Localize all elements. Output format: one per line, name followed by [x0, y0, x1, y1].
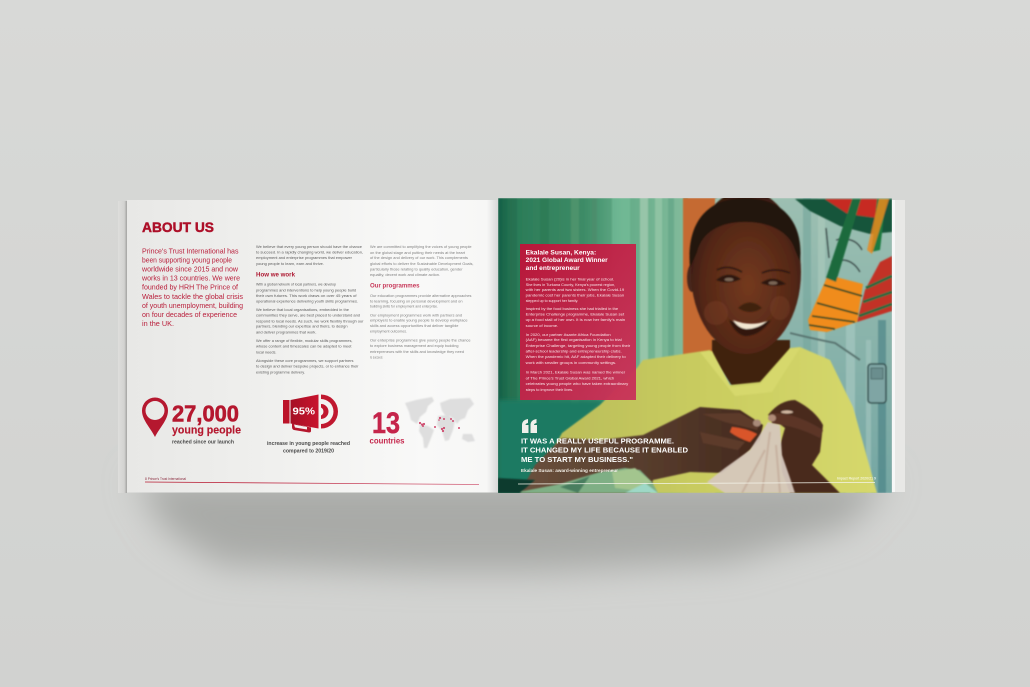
sub-heading: our programmes: Our programmes — [370, 282, 420, 290]
sub-heading: how we work: How we work — [256, 272, 295, 278]
text column: how we work — [256, 244, 364, 375]
text column: our programmes: to learning, focusing on personal development and on — [370, 298, 462, 303]
leaves — [498, 468, 658, 493]
text column: our programmes: equality, decent work and climate action. — [370, 272, 440, 277]
text column: how we work: programmes and interventions to help young people build — [256, 288, 356, 292]
stat: 27,000 young people — [142, 398, 241, 446]
lower-left dark teal area — [498, 400, 607, 493]
text column: our programmes: to explore business management and equip budding — [370, 343, 458, 348]
woman: yellow shirt — [530, 347, 877, 493]
number: 13 — [372, 407, 400, 440]
book shadow — [135, 478, 890, 572]
attribution: Ekalale Susan: award-winning entrepreneur — [521, 468, 618, 473]
text column: how we work: to design and deliver bespoke projects, or to enhance their — [256, 364, 359, 369]
background: green corrugated wall — [498, 198, 688, 493]
icon: map pin — [142, 398, 168, 437]
text column: how we work: young people to learn, earn and thrive. — [256, 261, 324, 266]
story body: (AAF) became the first organisation in Kenya to trial — [526, 337, 622, 342]
number: 27,000 — [172, 400, 239, 426]
intro text block: Prince's Trust International has — [142, 246, 239, 256]
story body: steps to improve their lives. — [526, 387, 573, 392]
story body: work with smaller groups in community settings. — [526, 360, 616, 365]
story body: She lives in Turkana County, Kenya's poorest region, — [526, 282, 615, 287]
story heading: Ekalale Susan, Kenya: — [526, 250, 596, 256]
text column: our programmes: We are committed to amplifying the voices of young people — [370, 244, 472, 249]
heading: about us: ABOUT US — [142, 219, 214, 235]
intro text block: works in 13 countries. We were — [141, 274, 240, 283]
text column: our programmes: to succeed. — [370, 355, 383, 360]
story body: Enterprise Challenge, targeting young people from their — [526, 343, 631, 348]
text column: how we work: employment and enterprise programmes that empower — [256, 255, 353, 260]
story body: Enterprise Challenge programme, Ekalale Susan set — [526, 312, 625, 316]
text column: our programmes: employers to enable young people to develop workplace — [370, 318, 468, 323]
footer: right page: Impact Report 2020/21 9 — [837, 476, 876, 480]
hanging hat and woven bags — [795, 199, 892, 332]
quote text: ME TO START MY BUSINESS." — [521, 457, 633, 464]
text column: how we work: local needs. — [256, 349, 276, 354]
story body: Ekalale Susan (20)is in her final year of school. — [526, 276, 614, 282]
text column: our programmes: on the global stage and putting their needs at the heart — [370, 250, 466, 255]
stat: 95% increase: compared to 2019/20 — [283, 448, 334, 454]
story body: with her parents and two sisters. When the Covid-19 — [526, 287, 625, 292]
photo: smiling young woman at her stall — [498, 190, 892, 493]
story body: Inspired by the food business she had trialled in the — [526, 306, 619, 311]
world map with location pins — [405, 397, 475, 448]
text column: our programmes: of the design and delivery of our work. This complements — [370, 255, 468, 260]
story body: celebrates young people who have taken extraordinary — [526, 381, 628, 386]
story body: In 2020, our partner Asante Africa Foundation — [526, 332, 611, 337]
label: countries — [370, 436, 405, 446]
story heading: 2021 Global Award Winner — [526, 257, 608, 264]
story heading: and entrepreneur — [526, 265, 580, 272]
woman: face features — [704, 267, 790, 336]
left page — [127, 200, 498, 492]
text column: how we work: We believe that every young person should have the chance — [256, 244, 363, 249]
intro text block: on four decades of experience — [142, 310, 237, 319]
text column: how we work: their own futures. This work draws on over 45 years of — [256, 293, 357, 298]
intro text block: founded by HRH The Prince of — [142, 283, 238, 292]
woman: ears, neck, head, hair — [687, 190, 801, 386]
text column: our programmes: skills and access opportunities that deliver tangible — [370, 323, 459, 328]
intro text block: been supporting young people — [142, 256, 232, 264]
text column: our programmes: global efforts to deliver the Sustainable Development Goals, — [370, 261, 474, 266]
intro text block — [141, 246, 243, 328]
text column: how we work: partners, blending our expertise and theirs, to design — [256, 324, 348, 329]
intro text block: Wales to tackle the global crisis — [142, 292, 243, 301]
text column: our programmes — [370, 244, 474, 360]
story body: pandemic cost her parents their jobs, Ekalale Susan — [526, 292, 624, 298]
story body — [526, 276, 631, 392]
text column: how we work: We believe that local organisations, embedded in the — [256, 307, 350, 312]
icon: quotation mark — [522, 419, 537, 433]
percent value: 95% — [292, 406, 315, 418]
text column: how we work: whose content and timescales can be adapted to meet — [256, 344, 352, 349]
text column: how we work: operational experience delivering youth skills programmes. — [256, 299, 358, 304]
pull quote — [521, 419, 688, 473]
right page edge — [892, 200, 905, 492]
story body: In March 2021, Ekalale Susan was named the winner — [526, 370, 626, 374]
stat: 95% increase — [267, 394, 350, 454]
intro text block: of youth unemployment, building — [142, 301, 243, 310]
text column: our programmes: building skills for employment and enterprise. — [370, 304, 438, 309]
text column: our programmes: Our employment programmes work with partners and — [370, 312, 462, 317]
caption: increase in young people reached — [267, 441, 350, 447]
text column: our programmes: employment outcomes. — [370, 328, 407, 333]
text column: how we work: Alongside these core programmes, we support partners — [256, 358, 354, 363]
intro text block: worldwide since 2015 and now — [141, 265, 239, 274]
text column: how we work: existing programme delivery. — [256, 370, 305, 375]
text column: our programmes: Our education programmes provide alternative approaches — [370, 293, 472, 298]
text column: our programmes: entrepreneurs with the skills and knowledge they need — [370, 349, 464, 354]
plastic bag — [707, 422, 795, 493]
text column: how we work: to succeed. In a rapidly changing world, we deliver education, — [256, 250, 363, 255]
story heading — [526, 250, 608, 272]
quote text: IT CHANGED MY LIFE BECAUSE IT ENABLED — [521, 448, 688, 455]
story body: after-school leadership and entrepreneurship clubs. — [526, 348, 622, 354]
story body: stepped up to support her family. — [526, 298, 578, 303]
text column: our programmes: particularly those relating to quality education, gender — [370, 266, 463, 272]
text column: how we work: respond to local needs. As such, we work flexibly through our — [256, 318, 364, 323]
background: orange wood post — [683, 198, 717, 363]
quote text — [521, 438, 688, 464]
background: teal corrugated wall — [715, 198, 892, 493]
text column: our programmes: Our enterprise programmes give young people the chance — [370, 337, 471, 342]
text column: how we work: communities they serve, are best placed to understand and — [256, 313, 360, 318]
woman: arm and hands holding a bag — [520, 400, 840, 493]
story body: When the pandemic hit, AAF adapted their delivery to — [526, 354, 627, 359]
stat: 13 countries — [370, 397, 475, 448]
intro text block: in the UK. — [142, 319, 174, 328]
book page edge: left — [118, 201, 127, 493]
story body: source of income. — [526, 323, 558, 328]
text column: how we work: With a global network of local partners, we develop — [256, 282, 337, 286]
text column: how we work: and deliver programmes that work. — [256, 329, 316, 334]
icon: megaphone — [283, 394, 338, 432]
label: young people — [172, 424, 241, 436]
story body: up a food stall of her own. It is now her family's main — [526, 317, 625, 322]
caption: reached since our launch — [172, 440, 234, 446]
red story panel — [520, 244, 636, 400]
quote text: IT WAS A REALLY USEFUL PROGRAMME. — [521, 438, 674, 446]
story body: of The Prince's Trust Global Award 2021, which — [526, 376, 614, 380]
text column: how we work: We offer a range of flexible, modular skills programmes, — [256, 338, 352, 343]
footer: page number and title: 8 Prince's Trust International — [145, 477, 186, 481]
